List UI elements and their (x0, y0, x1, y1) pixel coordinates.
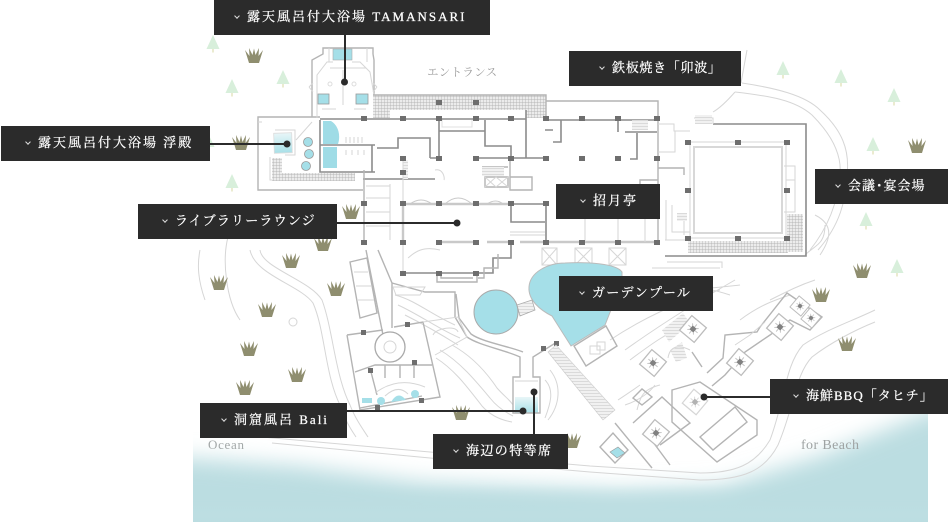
label: cave bath Bali (200, 403, 347, 438)
building: TAMANSARI bath (309, 48, 377, 118)
label: cave bath Bali: 洞窟風呂 Bali (234, 412, 329, 427)
label: teppanyaki Unami (569, 51, 741, 86)
coast roads and contours (198, 50, 875, 480)
label: garden pool (559, 276, 713, 311)
building: Bali wing and cave bath (347, 250, 467, 410)
place names on map: for Beach (801, 438, 859, 453)
sea (193, 414, 928, 522)
label: TAMANSARI open-air bath: 露天風呂付大浴場 TAMANSARI (247, 9, 466, 24)
label: Ukidono open-air bath (1, 126, 210, 161)
label: Ukidono open-air bath: 露天風呂付大浴場 浮殿 (38, 135, 193, 150)
label: seaside special seat (433, 434, 568, 469)
resort map illustration (193, 35, 928, 522)
leader lines and dots (210, 35, 770, 434)
place names on map: エントランス (427, 67, 497, 79)
label: seafood BBQ Tahiti (770, 379, 948, 414)
cottages (600, 293, 822, 465)
label: teppanyaki Unami: 鉄板焼き「卯波」 (612, 60, 722, 75)
label: seafood BBQ Tahiti: 海鮮BBQ「タヒチ」 (806, 388, 934, 403)
label: Shogetsutei: 招月亭 (593, 193, 638, 208)
building: floating bath UKIDONO (258, 117, 375, 190)
building: main hall (320, 95, 684, 282)
grass tufts (210, 48, 926, 448)
place names on map (208, 67, 859, 453)
hatched stairway (548, 313, 690, 468)
label: seaside special seat: 海辺の特等席 (466, 443, 552, 458)
label: garden pool: ガーデンプール (592, 285, 691, 300)
garden pool (474, 263, 622, 366)
building: banquet hall (652, 115, 806, 268)
label: conference and banquet halls (815, 169, 948, 204)
label: TAMANSARI open-air bath (214, 0, 490, 35)
label: Shogetsutei (556, 184, 660, 219)
label: library lounge (138, 204, 337, 239)
label: conference and banquet halls: 会議･宴会場 (848, 178, 926, 193)
building: seaside special seat (513, 341, 559, 413)
label: library lounge: ライブラリーラウンジ (175, 213, 316, 228)
trees (202, 35, 904, 276)
place names on map: Ocean (208, 437, 245, 452)
